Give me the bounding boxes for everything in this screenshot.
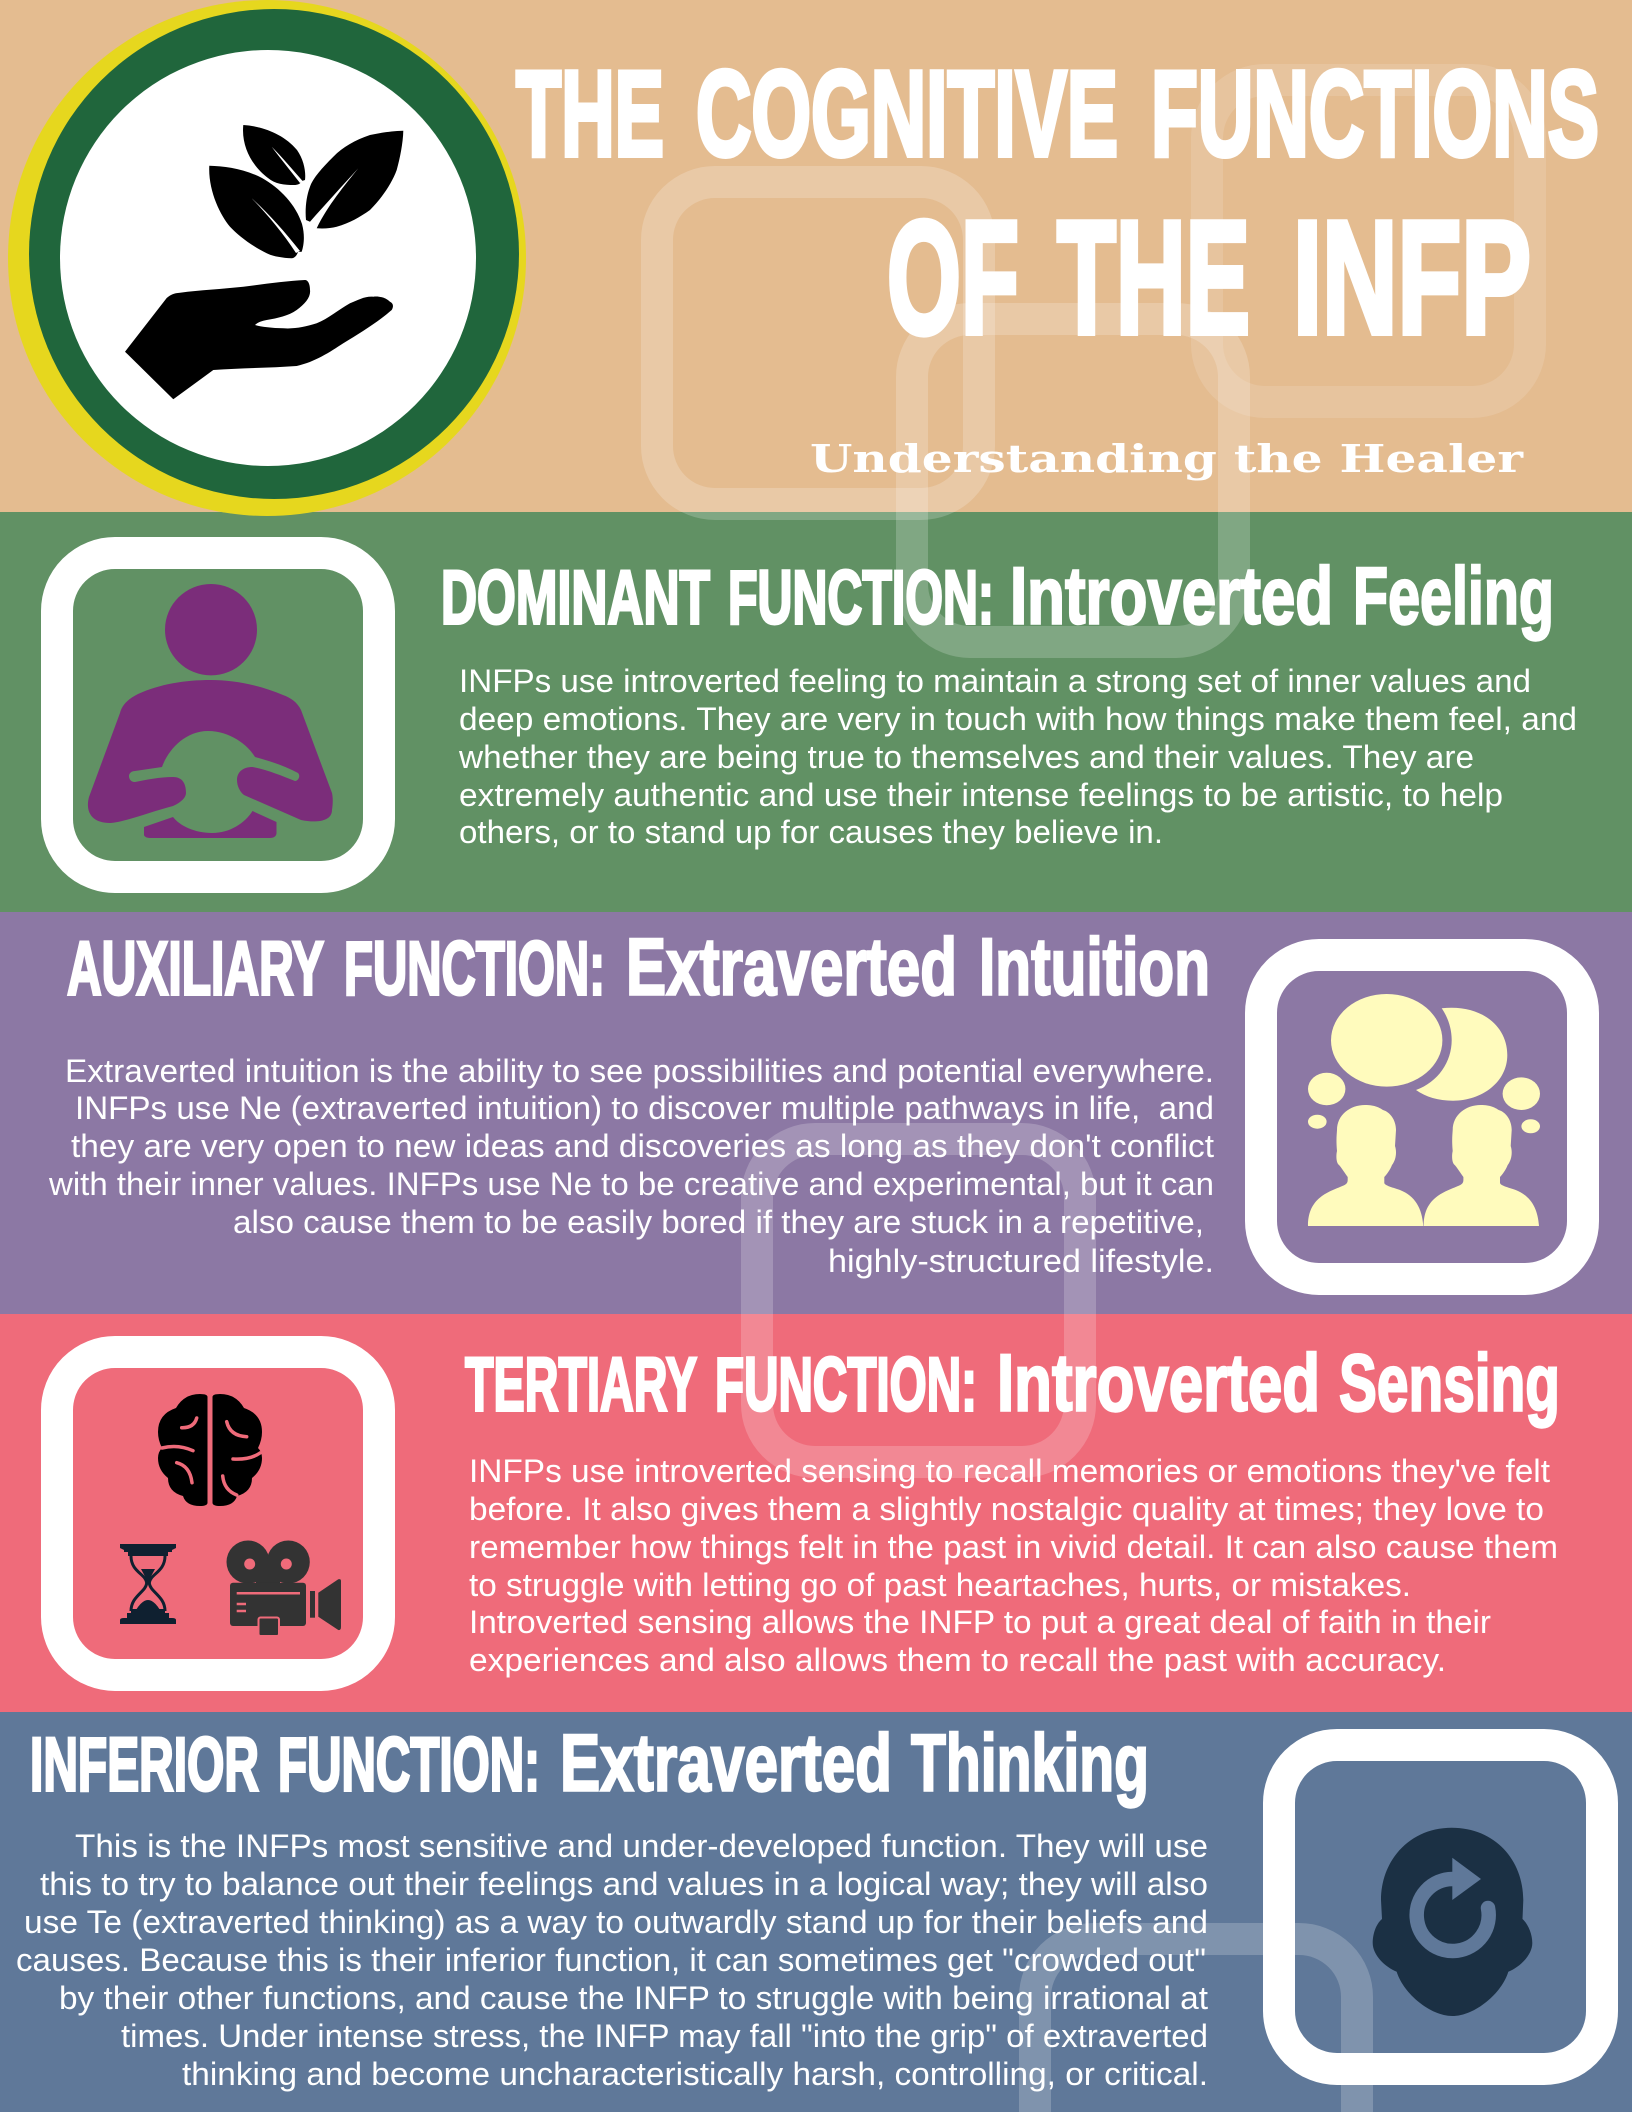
- body text: [48, 1053, 1214, 1279]
- body text: deep emotions. They are very in touch with how things make them feel, and: [459, 701, 1577, 737]
- body text: they are very open to new ideas and discoveries as long as they don't conflict: [71, 1128, 1214, 1164]
- body text: INFPs use introverted feeling to maintain a strong set of inner values and: [459, 663, 1531, 699]
- body text: remember how things felt in the past in vivid detail. It can also cause them: [469, 1529, 1558, 1565]
- title line 1: THE: [516, 46, 664, 182]
- icon frame with brain, hourglass and film camera: [57, 1352, 379, 1675]
- icon: plant in hand badge: [8, 0, 526, 516]
- body text: highly-structured lifestyle.: [828, 1243, 1214, 1279]
- body text: INFPs use introverted sensing to recall memories or emotions they've felt: [469, 1453, 1550, 1489]
- heading: Extraverted: [560, 1718, 892, 1808]
- heading: Extraverted: [626, 922, 957, 1012]
- body text: [16, 1828, 1208, 2092]
- body text: Introverted sensing allows the INFP to put a great deal of faith in their: [469, 1604, 1491, 1640]
- body text: Extraverted intuition is the ability to see possibilities and potential everywhere.: [65, 1053, 1214, 1089]
- heading: FUNCTION:: [728, 556, 994, 640]
- body text: causes. Because this is their inferior function, it can sometimes get "crowded out": [16, 1942, 1206, 1978]
- body text: to struggle with letting go of past heartaches, hurts, or mistakes.: [469, 1567, 1411, 1603]
- panel: header background: [0, 0, 1632, 512]
- heading: [465, 1338, 1560, 1428]
- heading: [67, 922, 1210, 1012]
- right leaf upper: [306, 131, 403, 229]
- section: tertiary function: [57, 1338, 1560, 1678]
- section: dominant function: [57, 552, 1577, 877]
- title line 2: THE: [1057, 188, 1250, 368]
- body text: use Te (extraverted thinking) as a way to outwardly stand up for their beliefs and: [24, 1904, 1208, 1940]
- leaf veins: [252, 147, 303, 253]
- body text: INFPs use Ne (extraverted intuition) to discover multiple pathways in life, and: [75, 1090, 1214, 1126]
- top leaf: [243, 125, 305, 185]
- body text: others, or to stand up for causes they believe in.: [459, 814, 1163, 850]
- heading: Thinking: [911, 1718, 1149, 1808]
- heading: INFERIOR: [30, 1722, 259, 1808]
- icon: hourglass: [120, 1544, 176, 1624]
- panel: tertiary function background: [0, 1314, 1632, 1712]
- decorative translucent rounded squares: [657, 80, 1530, 2112]
- body text: with their inner values. INFPs use Ne to be creative and experimental, but it can: [48, 1166, 1214, 1202]
- panel: auxiliary function background: [0, 912, 1632, 1314]
- heading: [441, 552, 1554, 642]
- body text: this to try to balance out their feelings and values in a logical way; they will also: [40, 1866, 1208, 1902]
- body text: before. It also gives them a slightly nostalgic quality at times; they love to: [469, 1491, 1544, 1527]
- body text: thinking and become uncharacteristically harsh, controlling, or critical.: [182, 2056, 1208, 2092]
- icon: brain: [158, 1394, 262, 1506]
- title line 1: COGNITIVE: [696, 46, 1118, 182]
- body text: times. Under intense stress, the INFP may fall "into the grip" of extraverted: [121, 2018, 1208, 2054]
- body text: [469, 1453, 1558, 1678]
- panel: dominant function background: [0, 512, 1632, 912]
- title line 2: OF: [887, 188, 1019, 368]
- left leaf: [209, 166, 304, 258]
- heading: FUNCTION:: [278, 1722, 540, 1808]
- heading: Introverted: [997, 1338, 1320, 1428]
- icon: two people talking: [1261, 955, 1583, 1279]
- body text: This is the INFPs most sensitive and under-developed function. They will use: [75, 1828, 1208, 1864]
- icon: head with rotating arrow: [1279, 1745, 1602, 2069]
- body text: also cause them to be easily bored if they are stuck in a repetitive,: [233, 1204, 1204, 1240]
- body text: extremely authentic and use their intense feelings to be artistic, to help: [459, 777, 1503, 813]
- panel: inferior function background: [0, 1712, 1632, 2112]
- heading: TERTIARY: [465, 1342, 697, 1428]
- heading: DOMINANT: [441, 556, 710, 640]
- heading: FUNCTION:: [344, 926, 605, 1012]
- heading: FUNCTION:: [715, 1342, 977, 1428]
- heading: AUXILIARY: [67, 926, 324, 1012]
- title line 1: [516, 46, 1599, 182]
- subtitle: Understanding the Healer: [810, 436, 1524, 481]
- title line 2: [887, 188, 1531, 368]
- heading: Intuition: [979, 922, 1210, 1012]
- section: inferior function: [16, 1718, 1602, 2092]
- body text: [458, 663, 1577, 850]
- heading: Introverted: [1010, 552, 1333, 642]
- hand: [125, 280, 393, 399]
- icon: person hugging heart: [57, 553, 379, 877]
- section: auxiliary function: [48, 922, 1583, 1279]
- heading: [30, 1718, 1149, 1808]
- icon: film camera: [226, 1540, 341, 1636]
- heading: Feeling: [1353, 552, 1554, 642]
- body text: whether they are being true to themselves and their values. They are: [458, 739, 1474, 775]
- body text: by their other functions, and cause the INFP to struggle with being irrational at: [59, 1980, 1208, 2016]
- body text: experiences and also allows them to recall the past with accuracy.: [469, 1642, 1446, 1678]
